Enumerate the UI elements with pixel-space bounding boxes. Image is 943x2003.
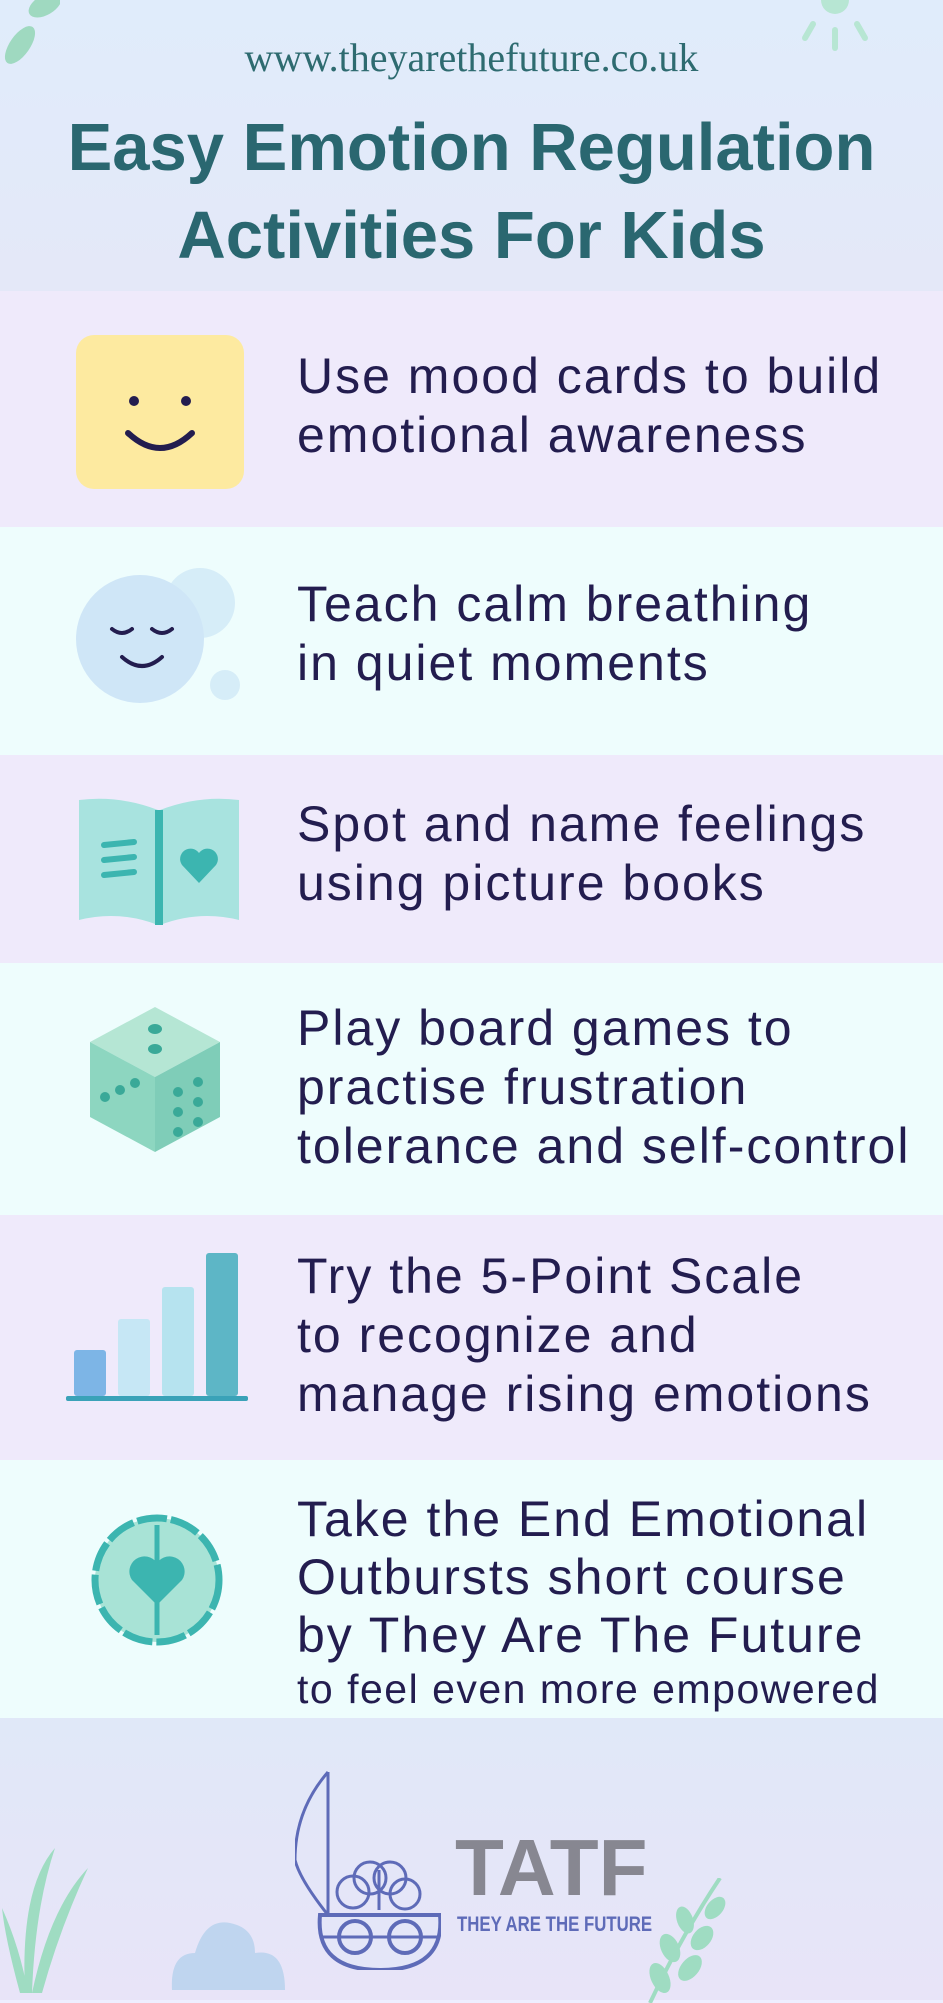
icon: smiley card xyxy=(76,335,244,489)
text: by They Are The Future xyxy=(297,1607,864,1663)
text: Outbursts short course xyxy=(297,1549,847,1605)
text xyxy=(297,1491,880,1712)
text xyxy=(297,796,866,911)
panel: 5-point scale xyxy=(0,1215,943,1460)
icon: dice xyxy=(90,1007,220,1152)
text: to feel even more empowered xyxy=(297,1666,880,1712)
decoration: leaves top-left xyxy=(5,0,60,64)
icon: brain heart xyxy=(92,1514,222,1646)
text xyxy=(297,576,812,691)
logo xyxy=(295,1771,652,1970)
text: practise frustration xyxy=(297,1059,748,1115)
text xyxy=(297,1248,872,1422)
decoration: sun rays xyxy=(802,0,868,51)
text: using picture books xyxy=(297,855,766,911)
logo: THEY ARE THE FUTURE xyxy=(457,1913,652,1936)
title xyxy=(68,110,875,273)
text: Use mood cards to build xyxy=(297,348,882,404)
text: in quiet moments xyxy=(297,635,710,691)
text: emotional awareness xyxy=(297,407,808,463)
decoration: grass xyxy=(2,1848,88,1993)
title: Activities For Kids xyxy=(177,198,766,273)
panel: course xyxy=(0,1460,943,1718)
website url: www.theyarethefuture.co.uk xyxy=(245,35,698,80)
text: Try the 5-Point Scale xyxy=(297,1248,804,1304)
icon: open book xyxy=(79,798,239,925)
header xyxy=(0,0,943,291)
panel: board games xyxy=(0,963,943,1215)
text xyxy=(297,1000,910,1174)
footer xyxy=(0,1718,943,2000)
text: Teach calm breathing xyxy=(297,576,812,632)
title: Easy Emotion Regulation xyxy=(68,110,875,185)
text: Play board games to xyxy=(297,1000,794,1056)
icon: bar chart xyxy=(66,1253,248,1401)
icon: logo head xyxy=(295,1771,441,1970)
text: manage rising emotions xyxy=(297,1366,872,1422)
panel: picture books xyxy=(0,755,943,963)
icon: calm face xyxy=(76,568,240,703)
logo text: TATF xyxy=(455,1823,648,1912)
decoration: cloud xyxy=(172,1922,285,1990)
panel: mood cards xyxy=(0,291,943,527)
decoration: leafy branch xyxy=(648,1878,726,2003)
text: to recognize and xyxy=(297,1307,699,1363)
text: tolerance and self-control xyxy=(297,1118,910,1174)
text: Spot and name feelings xyxy=(297,796,866,852)
panel: breathing xyxy=(0,527,943,755)
text: Take the End Emotional xyxy=(297,1491,869,1547)
text xyxy=(297,348,882,463)
